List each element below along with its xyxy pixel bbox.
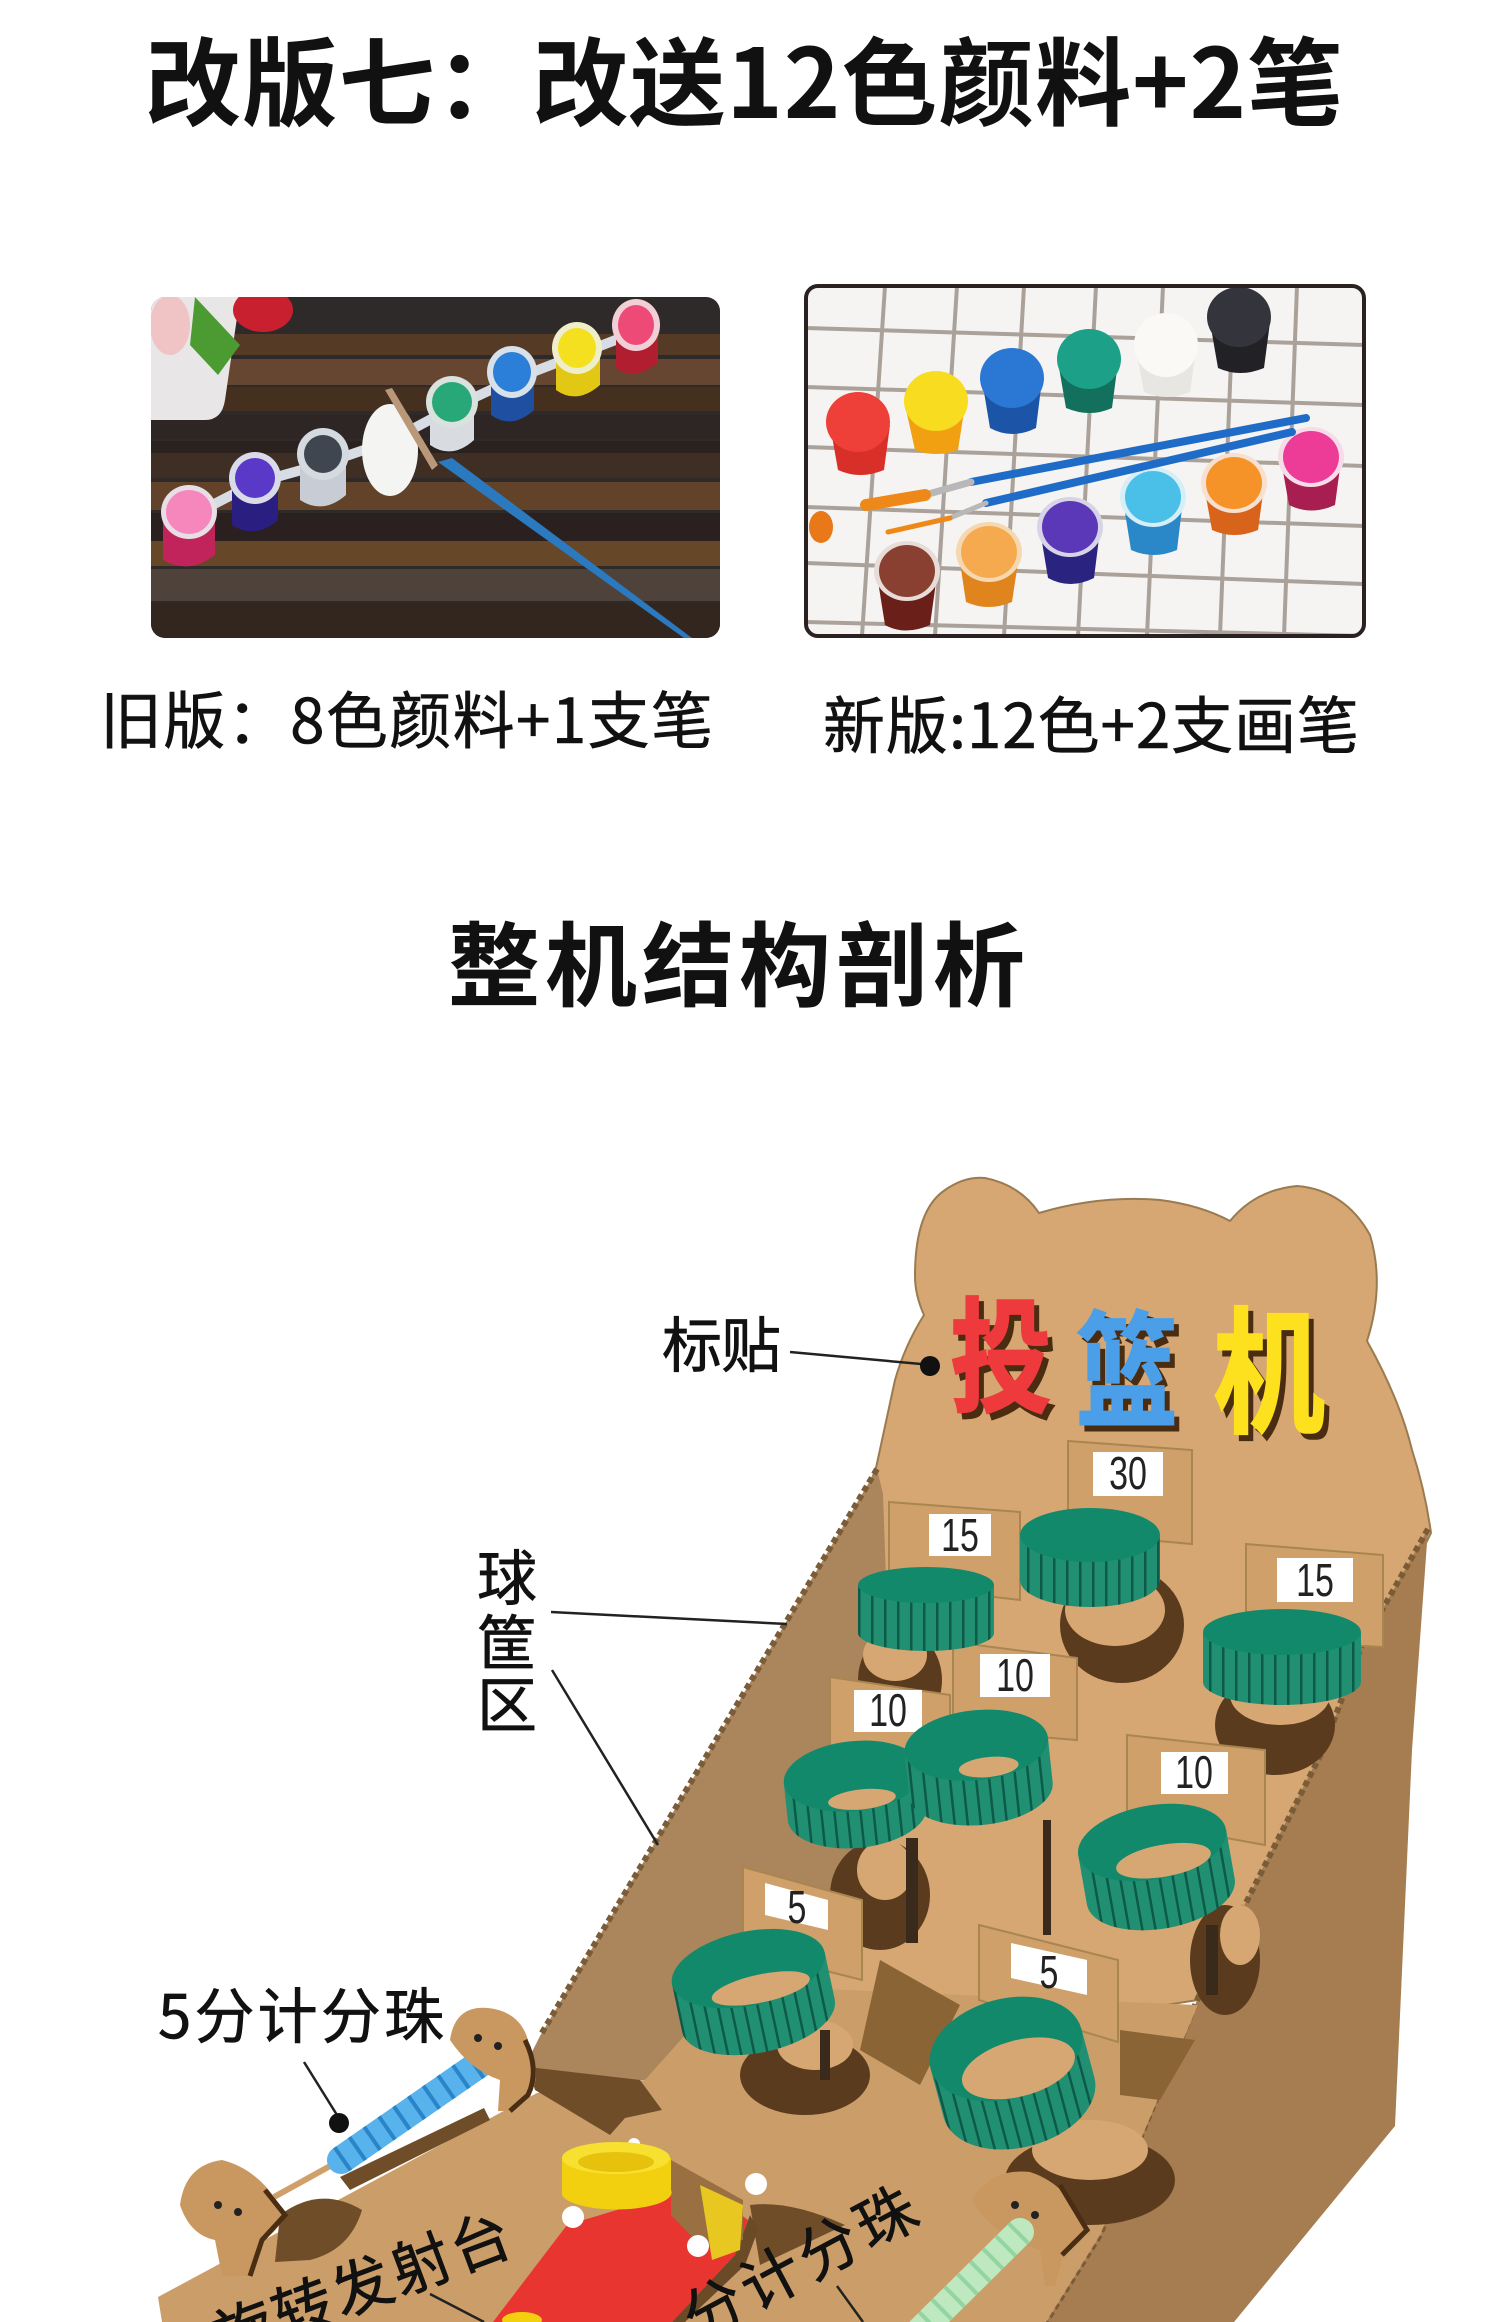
score card: 15 left bbox=[889, 1502, 1020, 1600]
icon: new paint pots bbox=[826, 287, 1344, 630]
bear-shaped backboard bbox=[645, 1178, 1431, 2085]
score card: 15 right bbox=[1246, 1544, 1383, 1647]
score card: 5 right bbox=[979, 1925, 1118, 2042]
basket: 15 right bbox=[1203, 1609, 1361, 1705]
icon: old paintbrush bbox=[385, 388, 692, 638]
icon: bear bead post top bbox=[450, 2008, 536, 2111]
panel: old paint set photo bbox=[150, 288, 720, 638]
sticker: 投篮机: 篮 bbox=[1081, 1278, 1183, 1458]
caption: old version: 旧版：8色颜料+1支笔 bbox=[100, 671, 713, 761]
label: 5-point score beads bbox=[158, 1969, 444, 2133]
icon: paint strip connector bbox=[214, 335, 616, 508]
score card: 10 right: 10 bbox=[1175, 1746, 1213, 1798]
icon: left bead rack bbox=[274, 2058, 488, 2197]
icon: old paint pots bbox=[161, 299, 660, 566]
icon: new paintbrushes bbox=[809, 418, 1306, 543]
basket shadows bbox=[740, 1567, 1335, 2225]
score card: 5 right: 5 bbox=[1040, 1946, 1058, 1998]
score card: 5 left bbox=[743, 1867, 862, 1980]
label: basket area: 筐 bbox=[477, 1596, 537, 1683]
sticker: 投篮机: 机 bbox=[1218, 1269, 1330, 1467]
basket: 10 center bbox=[904, 1710, 1053, 1826]
score card: 10 center bbox=[953, 1642, 1077, 1740]
score card: 10 right bbox=[1127, 1735, 1265, 1845]
score card: 5 left: 5 bbox=[788, 1881, 806, 1933]
sticker: 投篮机: 投 bbox=[955, 1264, 1057, 1444]
title: 改版七：改送12色颜料+2笔 bbox=[145, 7, 1343, 146]
icon: green score beads bbox=[921, 2232, 1020, 2322]
basket: 5 left bbox=[672, 1928, 836, 2056]
score card: 30: 30 bbox=[1109, 1447, 1147, 1499]
panel: new paint set photo bbox=[806, 286, 1364, 636]
icon: bear bead post bottom bbox=[180, 2160, 285, 2276]
icon: vase and flowers bbox=[150, 288, 293, 420]
sticker: 投篮机: 篮 bbox=[1076, 1272, 1178, 1452]
sticker: 投篮机 bbox=[952, 1295, 1330, 1442]
score card: 10 left bbox=[829, 1676, 951, 1745]
basket: 10 right bbox=[1078, 1804, 1235, 1930]
rotating launcher bbox=[493, 2138, 845, 2322]
floor and launch deck bbox=[158, 1985, 1198, 2322]
basket: 15 left bbox=[858, 1567, 994, 1651]
score card: 30 bbox=[1068, 1441, 1192, 1544]
label: sticker bbox=[662, 1298, 940, 1385]
score card: 10 left: 10 bbox=[869, 1684, 907, 1736]
diagram: cardboard basketball machine bbox=[158, 1178, 1431, 2322]
heading: structure analysis: 整机结构剖析 bbox=[448, 893, 1025, 1026]
caption: new version: 新版:12色+2支画笔 bbox=[823, 676, 1359, 766]
basket: 30 bbox=[1020, 1508, 1160, 1607]
cutout posts bbox=[820, 1820, 1218, 2080]
label: sticker: 标贴 bbox=[662, 1298, 781, 1385]
sticker: 投篮机: 投 bbox=[950, 1258, 1052, 1438]
right side wall bbox=[1046, 1529, 1428, 2322]
score card: 15 right: 15 bbox=[1296, 1554, 1334, 1606]
basket: 10 left bbox=[784, 1740, 925, 1848]
icon: bear bead post right bbox=[972, 2172, 1087, 2286]
label: basket area: 球 bbox=[477, 1531, 537, 1618]
sticker: 投篮机: 机 bbox=[1213, 1263, 1325, 1461]
left side wall bbox=[520, 1469, 889, 2086]
label: basket area bbox=[477, 1531, 787, 1845]
score card: 10 center: 10 bbox=[996, 1649, 1034, 1701]
label: 5-point score beads: 5分计分珠 bbox=[158, 1969, 444, 2056]
basket: 5 right bbox=[930, 1996, 1096, 2150]
score card: 15 left: 15 bbox=[941, 1509, 979, 1561]
label: basket area: 区 bbox=[477, 1658, 537, 1745]
